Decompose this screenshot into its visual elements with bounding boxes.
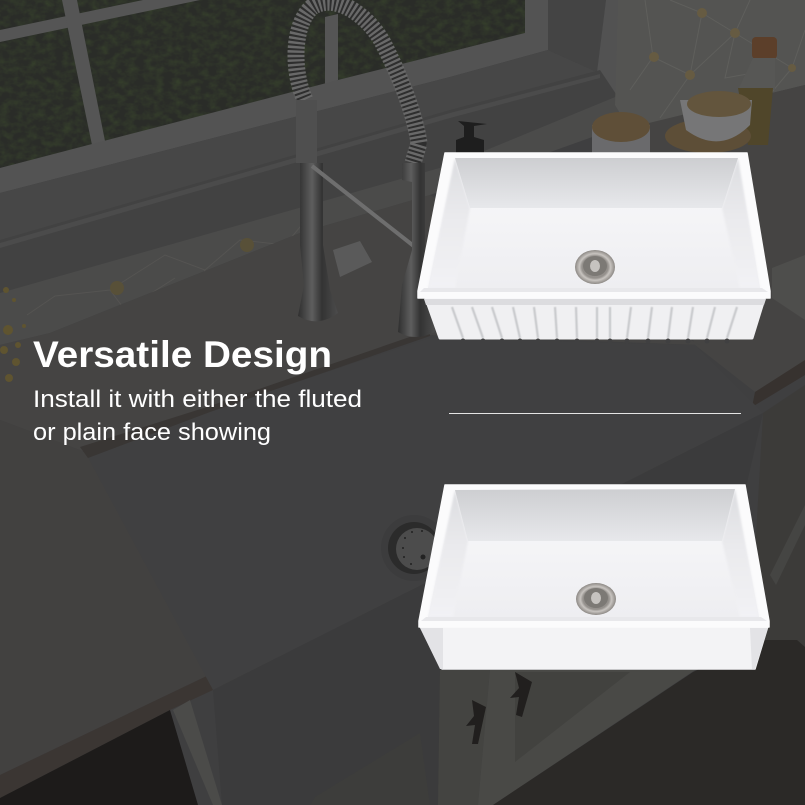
left inner wall: [428, 490, 468, 617]
plain apron: [420, 626, 768, 669]
rim: [419, 485, 769, 627]
back wall: [455, 489, 735, 541]
apron left bevel: [420, 628, 443, 669]
background sink body: [85, 338, 763, 690]
basin floor: [428, 158, 760, 288]
apron underside shade: [424, 299, 766, 305]
drain: [575, 250, 615, 284]
canister: [592, 112, 650, 155]
cabinet doors: [438, 670, 695, 805]
bowl stack: [665, 91, 752, 153]
cabinet handle left: [466, 700, 486, 744]
right inner wall: [722, 158, 760, 288]
background drain: [381, 515, 447, 581]
tiled backsplash lower: [0, 95, 640, 345]
spring coil: [296, 2, 419, 163]
soap dispenser: [456, 121, 487, 153]
divider line: [449, 413, 741, 414]
counter front edge: [0, 673, 213, 798]
cabinet door panel: [310, 733, 430, 805]
counter shelf edge: [752, 360, 805, 407]
left inner wall: [428, 158, 470, 288]
window frame and sill: [0, 0, 632, 300]
flute scallops: [460, 338, 730, 344]
top right countertop: [620, 85, 805, 392]
left flowers: [0, 287, 26, 382]
countertop items: [456, 37, 777, 155]
tiled wall upper right: [615, 0, 805, 130]
back wall: [455, 158, 738, 208]
rim: [418, 153, 770, 298]
fluted apron: [425, 296, 765, 338]
right cabinet side: [750, 385, 805, 650]
back countertop strip: [0, 195, 700, 452]
window muntins: [0, 0, 338, 145]
background sink rim shadow: [80, 330, 430, 458]
bottle: [738, 37, 777, 145]
dark floor: [493, 640, 805, 805]
flute grooves: [452, 307, 737, 338]
front rim highlight: [421, 617, 767, 621]
spray holder: [398, 163, 435, 337]
front rim highlight: [420, 288, 768, 292]
window glass with foliage: [0, 0, 540, 170]
background sink apron: [213, 413, 763, 805]
spray arm: [312, 166, 415, 247]
faucet: [296, 2, 435, 337]
cabinet trim left: [173, 700, 222, 805]
basin floor: [428, 489, 759, 617]
sink: fluted face: [418, 153, 770, 344]
faucet handle: [333, 241, 372, 277]
threaded column: [296, 100, 317, 163]
sink: plain face: [419, 485, 769, 669]
apron right bevel: [750, 628, 768, 669]
drain: [576, 583, 616, 615]
description: Install it with either the fluted: [33, 386, 362, 413]
left counter dark base: [0, 710, 198, 805]
left stone countertop: [0, 420, 213, 775]
title: Versatile Design: [33, 334, 332, 375]
right cabinet trim: [770, 505, 805, 585]
right inner wall: [722, 489, 759, 617]
cabinet handle right: [510, 672, 532, 717]
description: or plain face showing: [33, 419, 271, 446]
description: [33, 386, 362, 446]
faucet column: [298, 163, 338, 321]
paper on right counter: [772, 255, 805, 320]
